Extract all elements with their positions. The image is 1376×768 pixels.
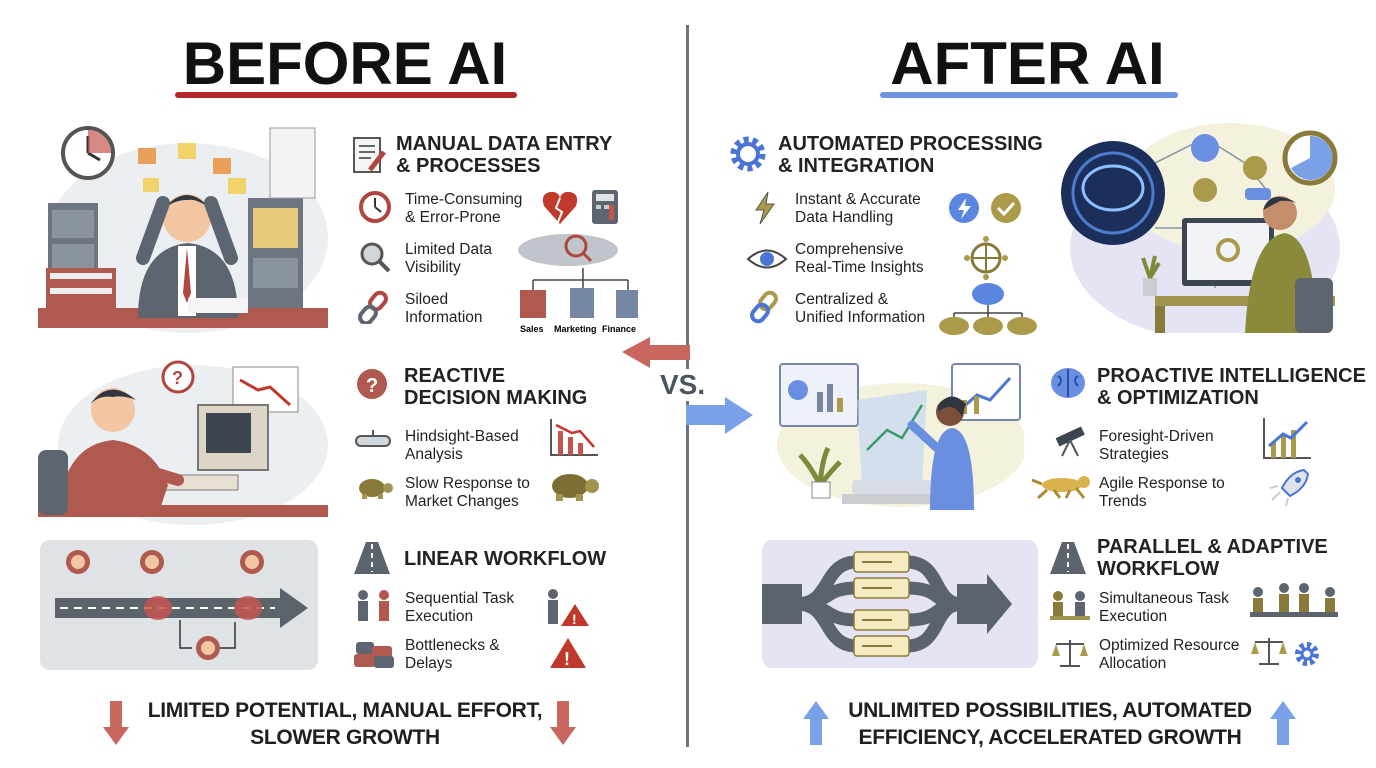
- panel: reactive decision making: [355, 365, 599, 510]
- illustration: analyst hologram: [762, 360, 1024, 510]
- item: Allocation: [1099, 655, 1166, 672]
- icon: handoff: [358, 590, 389, 621]
- icon: eye: [746, 250, 788, 268]
- icon: mirror: [355, 430, 391, 447]
- icon: cheetah: [1032, 472, 1094, 500]
- heading: PROACTIVE INTELLIGENCE: [1097, 365, 1366, 387]
- item: [405, 191, 522, 226]
- callout: after bottom: EFFICIENCY, ACCELERATED GROWTH: [858, 726, 1242, 749]
- panel: automated processing: [730, 133, 1043, 335]
- icon: up chart: [1261, 416, 1313, 460]
- panel: parallel workflow illustration: [762, 540, 1038, 668]
- icon: broken chain: [358, 290, 388, 324]
- icon: clock: [359, 191, 391, 223]
- item: Data Handling: [795, 209, 893, 226]
- item: Centralized &: [795, 291, 888, 308]
- heading: DECISION MAKING: [404, 387, 587, 409]
- item: Unified Information: [795, 309, 925, 326]
- item: Market Changes: [405, 493, 519, 510]
- panel: proactive intelligence: [1046, 362, 1366, 507]
- icon: scales: [1050, 636, 1090, 670]
- chart: silo departments: Sales: [520, 324, 544, 334]
- title: after ai: AFTER AI: [890, 30, 1165, 97]
- item: [795, 191, 921, 226]
- heading: & PROCESSES: [396, 155, 540, 177]
- icon: down chart: [550, 419, 598, 456]
- underline blue: [880, 92, 1178, 98]
- item: & Error-Prone: [405, 209, 501, 226]
- callout: before bottom: LIMITED POTENTIAL, MANUAL EFFORT,: [148, 699, 542, 722]
- chart: silo departments: [518, 234, 638, 334]
- divider: [686, 25, 689, 747]
- heading: & INTEGRATION: [778, 155, 934, 177]
- heading: [404, 365, 587, 409]
- item: Trends: [1099, 493, 1147, 510]
- item: [405, 475, 530, 510]
- icon: warning: !: [564, 649, 570, 669]
- item: Execution: [1099, 608, 1167, 625]
- icon: gear: [730, 136, 766, 172]
- icon: team meeting: [1246, 582, 1341, 626]
- icon: telescope: [1050, 422, 1090, 458]
- icon: document: [353, 137, 386, 173]
- callout: after bottom: UNLIMITED POSSIBILITIES, AUTOMATED: [848, 699, 1252, 722]
- icon: warning: [550, 638, 586, 669]
- underline red: [175, 92, 517, 98]
- illustration: stressed office worker: [38, 126, 328, 333]
- panel: manual data entry: [353, 133, 638, 334]
- item: [1099, 428, 1214, 464]
- item: Analysis: [405, 446, 463, 463]
- illustration: ai brain workstation: [1055, 118, 1340, 333]
- icon: road: [354, 542, 390, 574]
- panel: linear workflow illustration: [40, 540, 318, 670]
- item: Information: [405, 309, 483, 326]
- panel: parallel workflow text: [1046, 536, 1366, 676]
- heading: AUTOMATED PROCESSING: [778, 133, 1043, 155]
- icon: cloud network: [938, 280, 1038, 336]
- item: Real-Time Insights: [795, 259, 924, 276]
- heading: LINEAR WORKFLOW: [404, 548, 606, 570]
- item: [405, 241, 492, 276]
- callout: before bottom: SLOWER GROWTH: [250, 726, 440, 749]
- item: Foresight-Driven: [1099, 428, 1214, 445]
- chart: silo departments: Finance: [602, 324, 636, 334]
- item: Instant & Accurate: [795, 191, 921, 208]
- icon: turtle: [359, 479, 393, 499]
- item: Strategies: [1099, 446, 1169, 463]
- icon: person warning: !: [572, 611, 577, 627]
- item: Time-Consuming: [405, 191, 522, 208]
- item: Simultaneous Task: [1099, 590, 1229, 607]
- icons: bolt check: [946, 190, 1026, 226]
- item: [1099, 637, 1239, 673]
- item: Slow Response to: [405, 475, 530, 492]
- item: [795, 291, 925, 327]
- item: Agile Response to: [1099, 475, 1225, 492]
- item: Visibility: [405, 259, 461, 276]
- icon: traffic: [354, 642, 394, 668]
- heading: [1097, 536, 1357, 580]
- item: Sequential Task: [405, 590, 514, 607]
- heading: WORKFLOW: [1097, 558, 1219, 580]
- heading: PARALLEL & ADAPTIVE: [1097, 536, 1328, 558]
- icon: brain: [1048, 364, 1088, 402]
- chart: silo departments: Marketing: [554, 324, 597, 334]
- item: [405, 428, 519, 463]
- heading: [396, 133, 612, 177]
- heading: [778, 133, 1043, 177]
- item: Limited Data: [405, 241, 492, 258]
- illustration: worker at old computer: [38, 360, 328, 525]
- heading: REACTIVE: [404, 365, 505, 387]
- callout: after bottom: [800, 697, 1300, 749]
- vs block: [622, 337, 753, 434]
- item: Bottlenecks &: [405, 637, 500, 654]
- icon: rocket: [1268, 466, 1312, 506]
- icon: team: [1048, 588, 1092, 624]
- title: before ai: BEFORE AI: [183, 30, 507, 97]
- illustration: worker at old computer: ?: [172, 368, 183, 388]
- item: Siloed: [405, 291, 448, 308]
- icon: question: [357, 369, 387, 399]
- icon: lightning: [755, 192, 775, 224]
- callout: before bottom: [103, 699, 576, 749]
- panel: linear workflow text: [354, 542, 606, 672]
- item: [1099, 590, 1229, 626]
- icon: turtle large: [552, 474, 599, 501]
- icon: scales gear: [1251, 634, 1323, 670]
- item: Delays: [405, 655, 452, 672]
- item: [405, 637, 500, 672]
- vs block: VS.: [660, 369, 705, 400]
- item: [795, 241, 924, 276]
- heading: MANUAL DATA ENTRY: [396, 133, 612, 155]
- item: Hindsight-Based: [405, 428, 519, 445]
- icon: broken heart & calculator: [542, 190, 618, 224]
- icon: globe: [964, 236, 1008, 280]
- icon: person warning: [548, 589, 589, 627]
- item: Optimized Resource: [1099, 637, 1239, 654]
- icon: question: ?: [366, 375, 378, 397]
- heading: & OPTIMIZATION: [1097, 387, 1259, 409]
- item: [405, 590, 514, 625]
- icon: chain: [750, 290, 778, 324]
- icon: magnifier: [360, 242, 390, 272]
- icon: road: [1048, 540, 1088, 576]
- item: [405, 291, 483, 326]
- heading: [1097, 365, 1367, 409]
- item: [1099, 475, 1225, 511]
- item: Execution: [405, 608, 473, 625]
- item: Comprehensive: [795, 241, 904, 258]
